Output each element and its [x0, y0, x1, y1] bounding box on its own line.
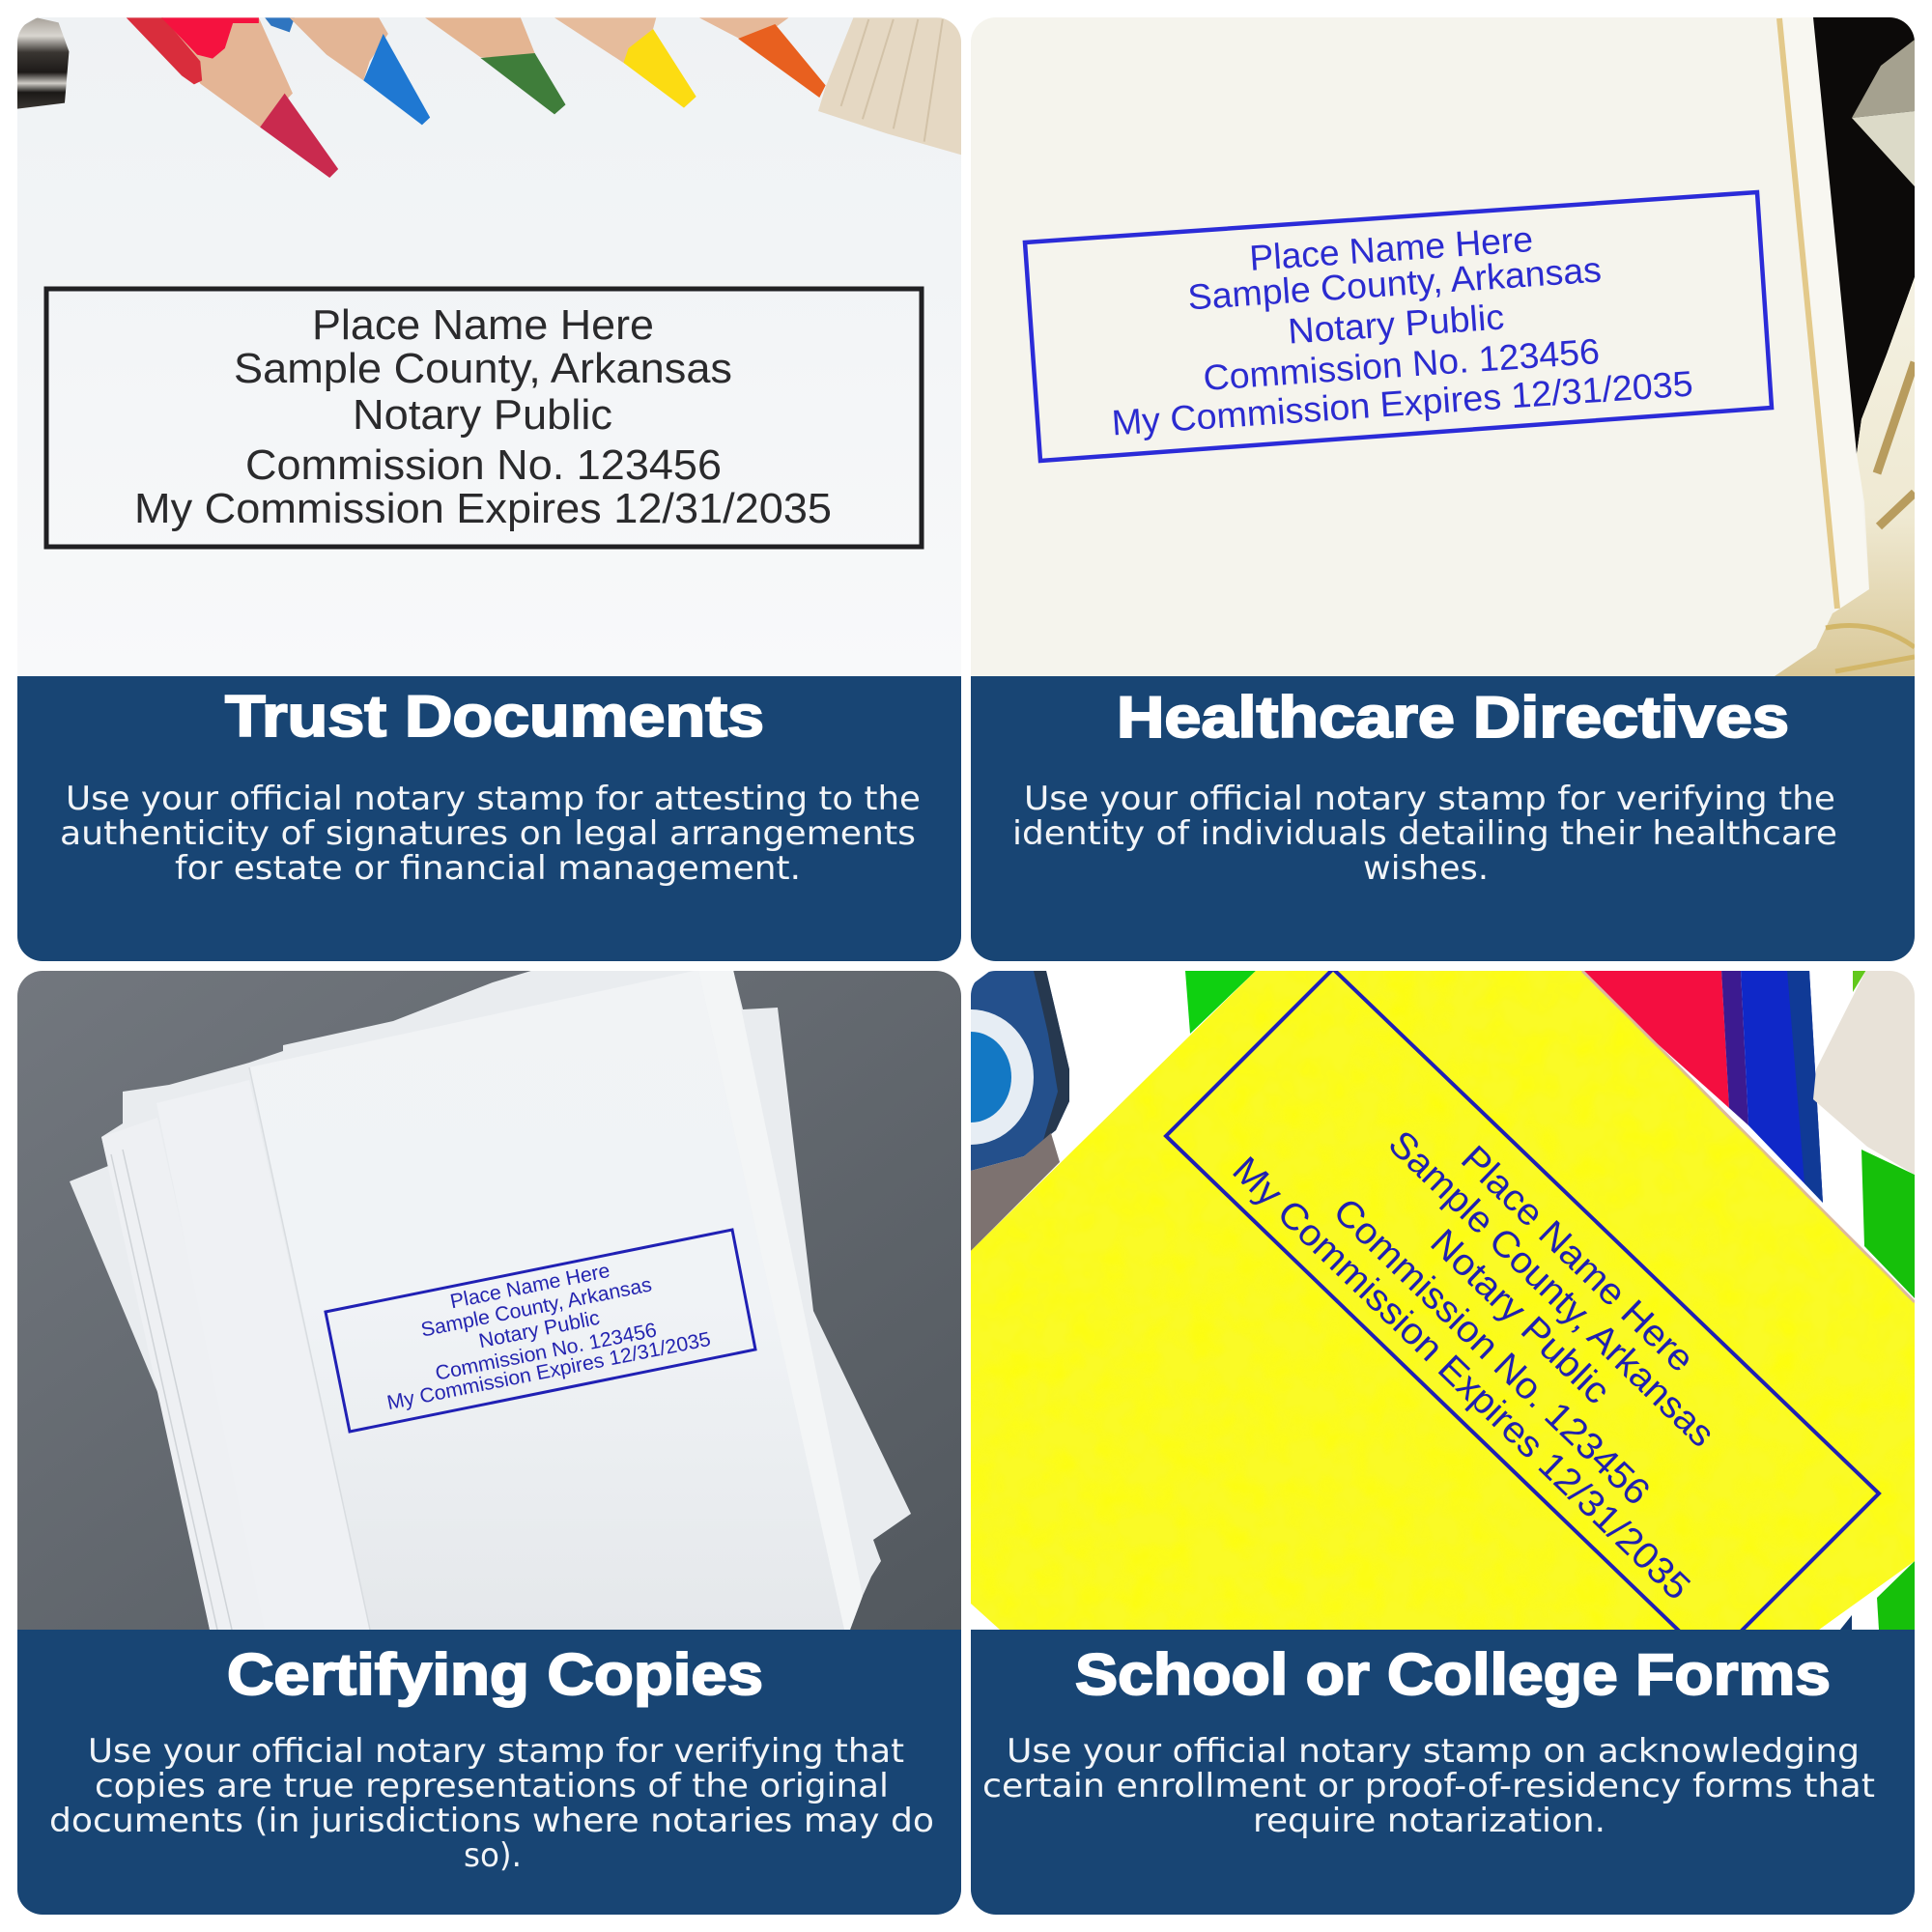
black notary stamp impression: Commission No. 123456 — [245, 441, 722, 489]
blue notary stamp impression: My Commission Expires 12/31/2035 — [385, 1328, 713, 1414]
photo: cream card with ribbon — [971, 17, 1915, 676]
blue notary stamp impression — [1025, 192, 1772, 461]
caption band — [971, 1630, 1915, 1915]
blue notary stamp impression: Commission No. 123456 — [1202, 331, 1601, 398]
description: Use your official notary stamp for verifying the — [1024, 780, 1835, 818]
description — [982, 1732, 1875, 1840]
blue notary stamp impression — [1166, 969, 1879, 1662]
photo: pencils and black stamp on white paper — [17, 17, 961, 607]
description: for estate or financial management. — [175, 849, 801, 888]
heading: Certifying Copies — [227, 1642, 763, 1707]
black notary stamp impression: Notary Public — [353, 391, 612, 439]
blue notary stamp impression — [326, 1230, 755, 1432]
blue notary stamp impression: Notary Public — [1422, 1221, 1618, 1412]
heading: Healthcare Directives — [1117, 685, 1789, 750]
black notary stamp impression: Place Name Here — [312, 301, 654, 349]
black notary stamp impression — [46, 289, 922, 547]
description — [60, 780, 921, 888]
description: certain enrollment or proof-of-residency forms that — [982, 1767, 1875, 1805]
description: so). — [464, 1836, 522, 1875]
black notary stamp impression: My Commission Expires 12/31/2035 — [134, 485, 832, 532]
description: authenticity of signatures on legal arrangements — [60, 814, 916, 853]
description — [49, 1732, 934, 1875]
description — [1012, 780, 1837, 888]
description: require notarization. — [1253, 1802, 1605, 1840]
blue notary stamp impression: My Commission Expires 12/31/2035 — [1225, 1149, 1698, 1608]
blue notary stamp impression: Notary Public — [477, 1307, 602, 1352]
caption band — [17, 1630, 961, 1915]
description: Use your official notary stamp for attesting to the — [66, 780, 921, 818]
blue notary stamp impression: Commission No. 123456 — [434, 1319, 659, 1385]
blue notary stamp impression: Place Name Here — [1248, 219, 1534, 278]
photo: stack of white papers on grey — [17, 970, 961, 1630]
description: wishes. — [1363, 849, 1489, 888]
caption band — [17, 676, 961, 961]
blue notary stamp impression: Sample County, Arkansas — [1380, 1122, 1722, 1455]
panel: healthcare directives — [971, 17, 1915, 961]
panel: trust documents — [17, 17, 966, 961]
heading: Trust Documents — [225, 684, 764, 749]
blue notary stamp impression: Sample County, Arkansas — [419, 1273, 654, 1342]
photo: yellow notebook with scissors and pens — [908, 970, 1915, 1630]
blue notary stamp impression: My Commission Expires 12/31/2035 — [1110, 364, 1694, 442]
panel: school or college forms — [908, 969, 1915, 1915]
description: documents (in jurisdictions where notaries may do — [49, 1802, 934, 1840]
blue notary stamp impression: Place Name Here — [1453, 1138, 1702, 1380]
description: Use your official notary stamp on acknowledging — [1007, 1732, 1860, 1771]
description: identity of individuals detailing their healthcare — [1012, 814, 1837, 853]
black notary stamp impression: Sample County, Arkansas — [234, 345, 732, 392]
blue notary stamp impression: Notary Public — [1287, 297, 1505, 352]
heading: School or College Forms — [1075, 1642, 1831, 1707]
blue notary stamp impression: Sample County, Arkansas — [1186, 249, 1603, 318]
blue notary stamp impression: Place Name Here — [448, 1260, 611, 1313]
caption band — [971, 676, 1915, 961]
blue notary stamp impression: Commission No. 123456 — [1325, 1190, 1658, 1514]
description: copies are true representations of the original — [95, 1767, 889, 1805]
description: Use your official notary stamp for verifying that — [88, 1732, 904, 1771]
panel: certifying copies — [17, 970, 961, 1915]
